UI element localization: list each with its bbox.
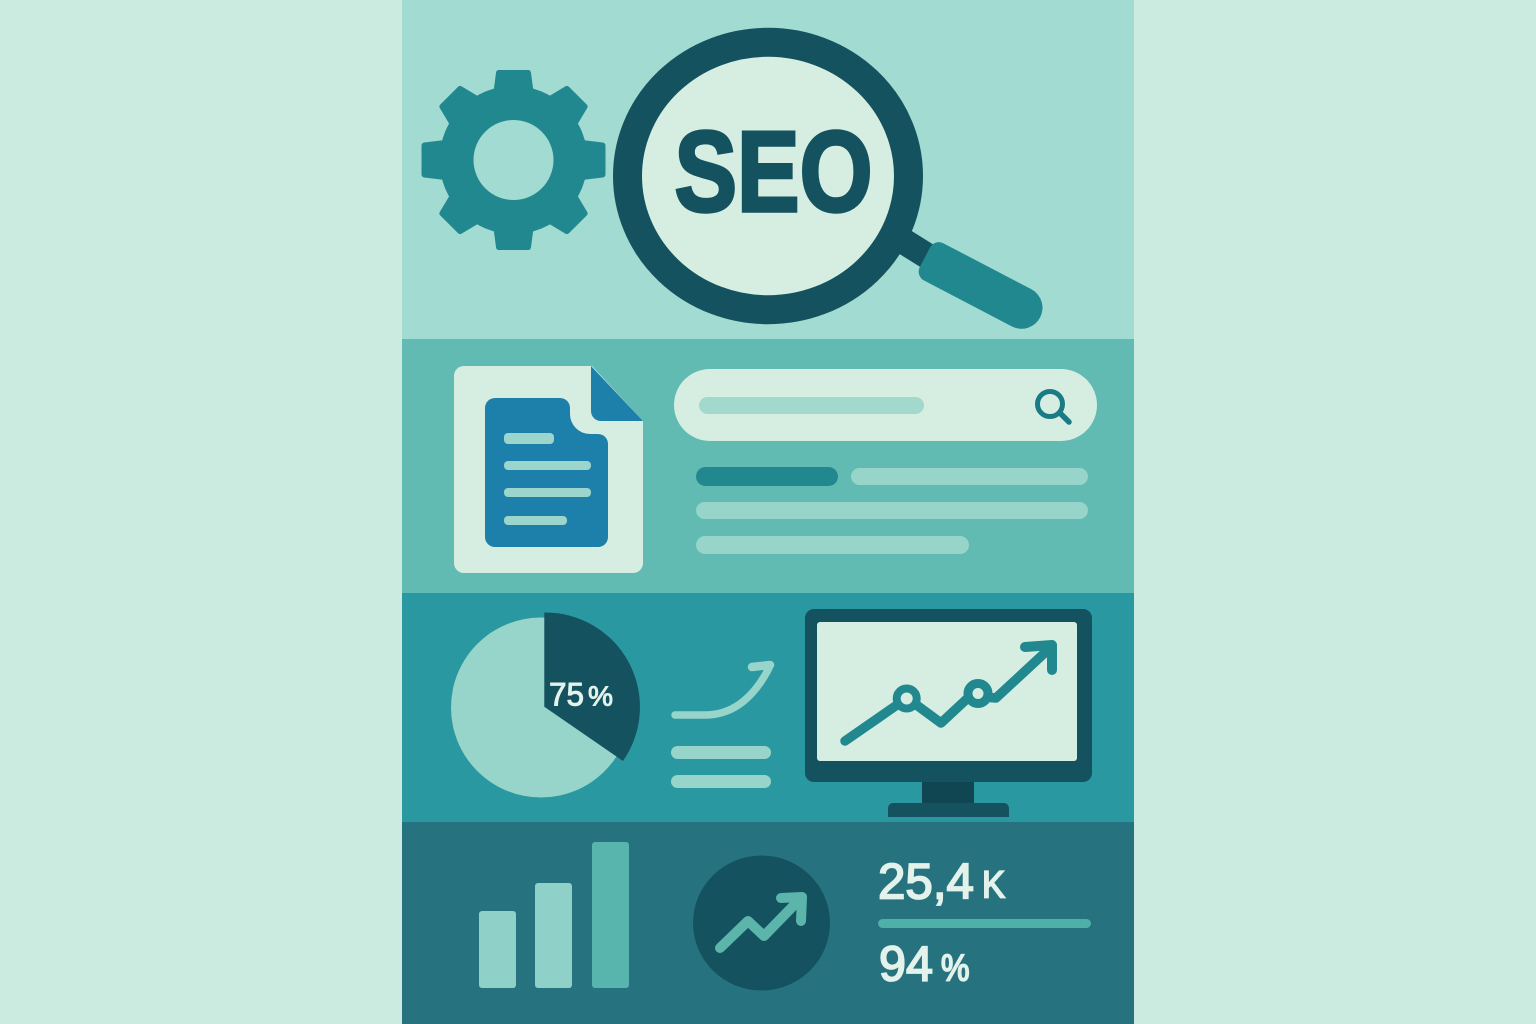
stat: visits: 25,4 [878,854,974,910]
icon: trend circle [693,856,830,990]
panel: analytics [402,593,1134,822]
panel: search results [402,339,1134,593]
SEO title: SEO [674,109,872,236]
stat: visits: K [982,864,1005,906]
icon: curved arrow with lines [671,665,771,788]
pie label: 75 [549,676,584,712]
monitor with line chart [805,609,1092,817]
pie label [549,676,613,712]
icon: magnifying glass [628,42,1050,336]
stat: percent: 94 [879,938,933,992]
stat divider bar [878,919,1091,928]
icon: gear [424,73,602,247]
panel: SEO header [402,0,1134,339]
bar chart [479,842,629,988]
search bar [674,369,1097,441]
icon: document card [454,366,643,573]
panel: metrics [402,822,1134,1024]
pie chart [451,612,640,798]
pie label: % [588,680,613,712]
result lines [696,467,1088,554]
icon: small magnifier [1038,392,1069,422]
stat: percent [879,938,970,992]
stat: percent: % [941,948,970,988]
